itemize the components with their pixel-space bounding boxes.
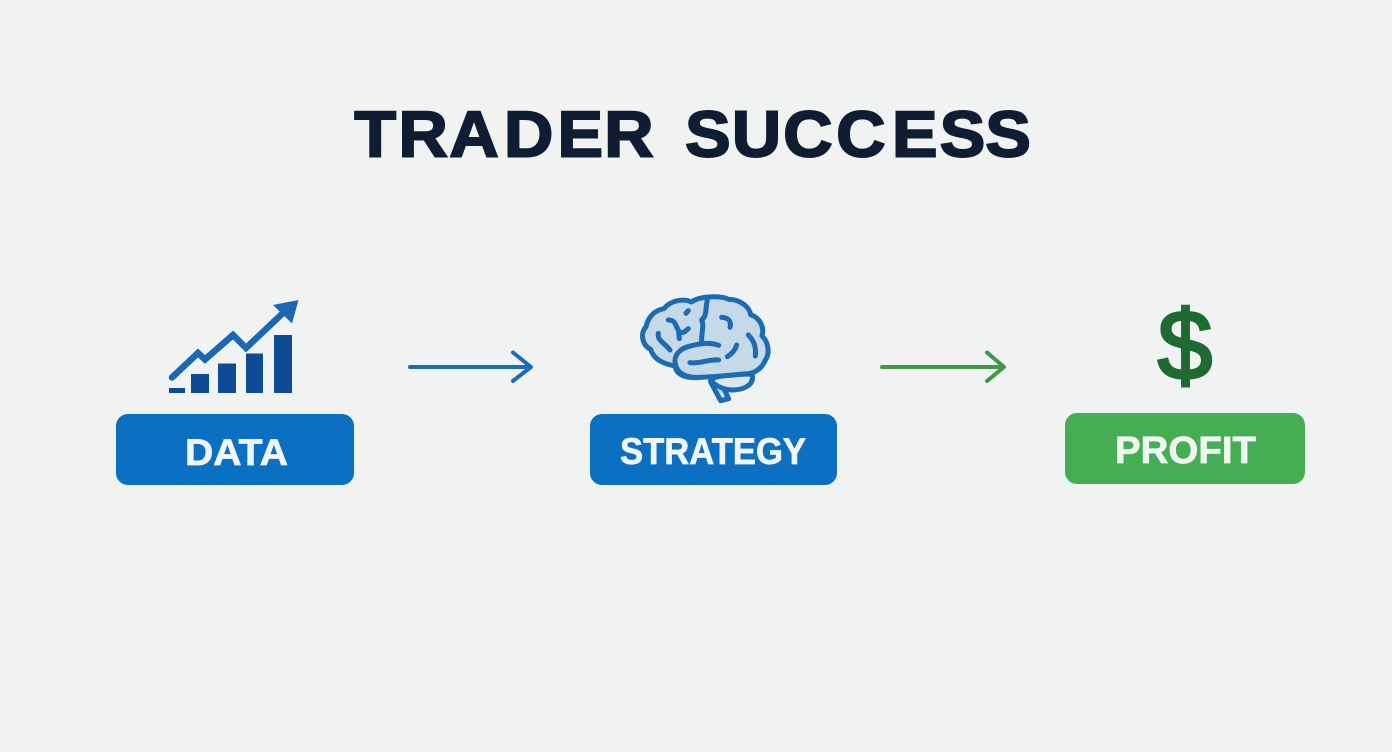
title: SUCCESS xyxy=(685,99,1031,171)
label: profit xyxy=(1065,413,1305,484)
label: strategy: STRATEGY xyxy=(620,431,806,472)
label: data xyxy=(116,414,354,485)
label: data: DATA xyxy=(185,432,288,473)
title xyxy=(354,99,1031,171)
brain hemisphere outline xyxy=(643,297,768,378)
label: strategy xyxy=(590,414,837,485)
icon: rising bar chart with arrow xyxy=(169,300,298,393)
label: profit: PROFIT xyxy=(1115,430,1256,472)
title: TRADER xyxy=(354,99,654,171)
brain stem and cerebellum xyxy=(711,374,753,401)
icon: brain xyxy=(643,297,768,401)
brain folds xyxy=(658,300,756,377)
arrow: strategy to profit xyxy=(882,352,1004,381)
arrow: data to strategy xyxy=(410,352,531,381)
icon: dollar sign: $ xyxy=(1158,290,1212,400)
